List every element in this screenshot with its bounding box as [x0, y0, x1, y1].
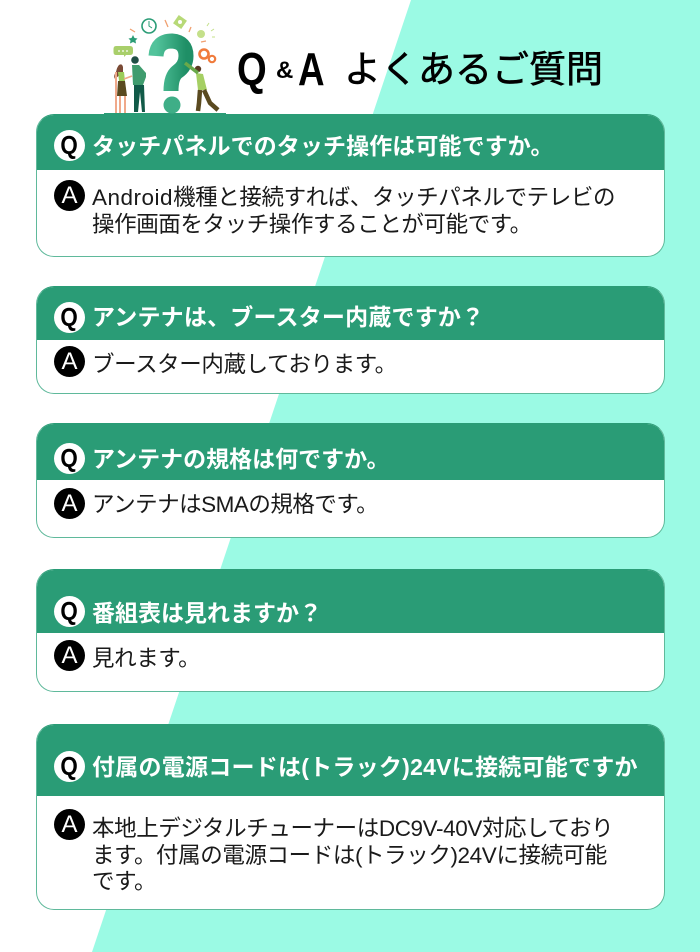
Q badge 1 [54, 130, 85, 161]
A badge 2 [54, 346, 85, 377]
Q badge 5: Q [61, 751, 78, 781]
Q badge 3 [54, 443, 85, 474]
A badge 4 [54, 640, 85, 671]
title: Q&A [237, 43, 325, 95]
A badge 1: A [61, 182, 78, 209]
A badge 3: A [61, 490, 78, 517]
answer 2 text: ブースター内蔵しております。 [92, 352, 397, 377]
question 3 text: アンテナの規格は何ですか。 [92, 446, 390, 472]
answer 5 text [92, 816, 613, 894]
A badge 5 [54, 809, 85, 840]
panel: question 1 [36, 114, 665, 257]
A badge 2: A [61, 348, 78, 375]
title: Q&A: & [276, 57, 293, 84]
Q badge 4: Q [61, 596, 78, 626]
Q badge 1: Q [61, 130, 78, 160]
Q badge 4 [54, 596, 85, 627]
header 5 [36, 724, 665, 796]
panel: question 5 [36, 724, 665, 910]
Q badge 2: Q [61, 302, 78, 332]
answer 1 text: Android機種と接続すれば、タッチパネルでテレビの [92, 185, 615, 210]
question 4 text: 番組表は見れますか？ [92, 600, 322, 626]
panel: question 2 [36, 286, 665, 394]
header 3 [36, 423, 665, 480]
A badge 4: A [61, 642, 78, 669]
header 4 [36, 569, 665, 633]
question 5 text: 付属の電源コードは(トラック)24Vに接続可能ですか [92, 754, 638, 780]
title: Q&A: Q [237, 43, 267, 95]
answer 1 text: 操作画面をタッチ操作することが可能です。 [92, 212, 532, 237]
A badge 1 [54, 180, 85, 211]
answer 5 text: ます。付属の電源コードは(トラック)24Vに接続可能 [92, 842, 607, 868]
question 1 text: タッチパネルでのタッチ操作は可能ですか。 [92, 133, 554, 159]
A badge 3 [54, 488, 85, 519]
header 2 [36, 286, 665, 340]
title: Japanese: よくあるご質問 [344, 49, 603, 90]
answer 5 text: 本地上デジタルチューナーはDC9V-40V対応しており [92, 816, 613, 841]
panel: question 3 [36, 423, 665, 538]
A badge 5: A [61, 811, 78, 838]
answer 5 text: です。 [92, 869, 156, 894]
illustration: people and question mark [104, 15, 226, 114]
title: Q&A: A [298, 43, 325, 95]
answer 4 text: 見れます。 [92, 646, 200, 671]
question 2 text: アンテナは、ブースター内蔵ですか？ [92, 304, 484, 330]
Q badge 5 [54, 751, 85, 782]
panel: question 4 [36, 569, 665, 692]
answer 3 text: アンテナはSMAの規格です。 [92, 492, 378, 517]
header 1 [36, 114, 665, 170]
answer 1 text [92, 185, 615, 237]
Q badge 3: Q [61, 443, 78, 473]
Q badge 2 [54, 302, 85, 333]
